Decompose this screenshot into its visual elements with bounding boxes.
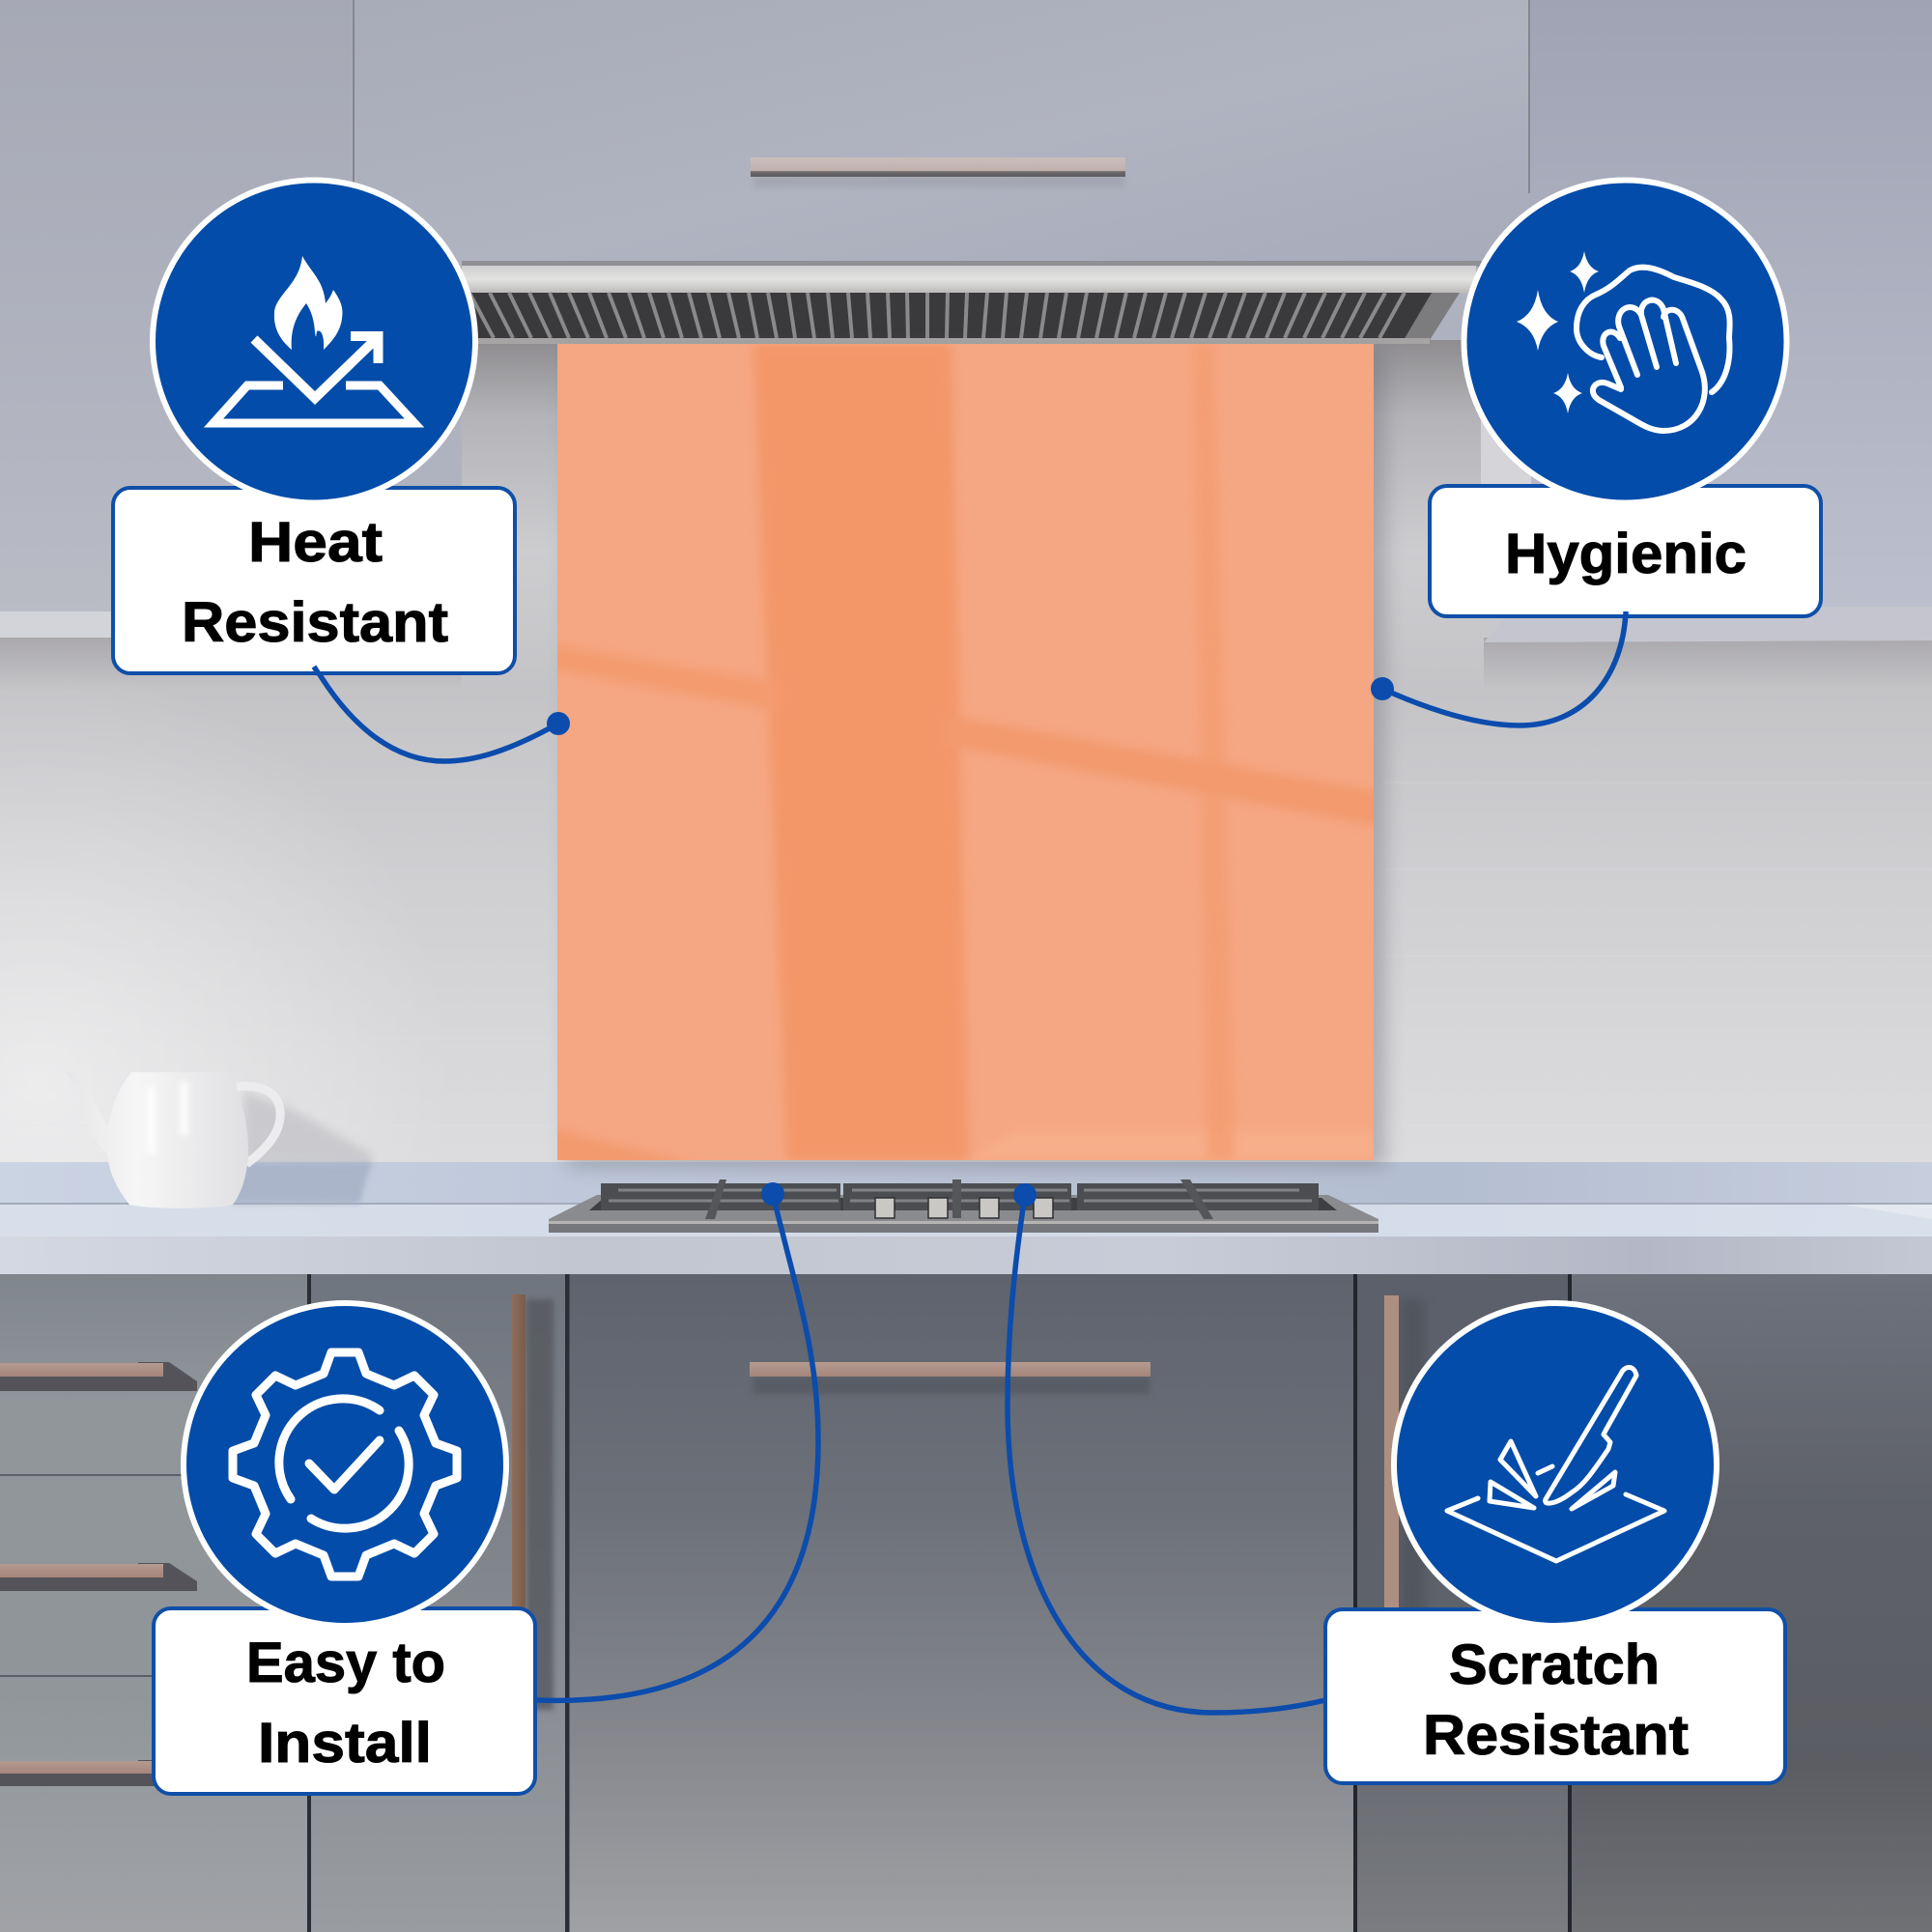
icon: gear with check mark: [233, 1352, 457, 1577]
label text: [246, 1632, 445, 1775]
icon badge: [1394, 1303, 1717, 1626]
label text: Easy to: [246, 1632, 445, 1694]
grate: centre: [843, 1179, 1071, 1218]
connector: heat resistant: [316, 668, 570, 761]
connector: easy to install: [537, 1182, 818, 1700]
kitchen background: upper cabinets: [0, 0, 1932, 640]
label text: [182, 511, 448, 654]
icon: flame over reflective surface: [213, 256, 414, 423]
label text: Resistant: [1423, 1704, 1689, 1767]
icon badge: [184, 1303, 506, 1626]
range hood: [444, 261, 1486, 344]
connector join: [314, 667, 319, 674]
icon badge: [1464, 180, 1787, 502]
label box: [1430, 486, 1821, 616]
icon: knife scratching surface: [1447, 1367, 1664, 1561]
callout: heat resistant: [113, 180, 515, 674]
upper cabinet handle: [751, 157, 1125, 187]
door handles: [512, 1294, 1425, 1710]
connector: hygienic: [1371, 611, 1626, 725]
panel: orange glass splashback: [551, 344, 1381, 1164]
countertop: [0, 1162, 1932, 1275]
label text: Scratch: [1449, 1634, 1660, 1696]
hob knobs: [875, 1198, 1053, 1218]
label text: Install: [258, 1712, 432, 1775]
callout: easy to install: [154, 1303, 535, 1794]
callout: hygienic: [1430, 180, 1821, 618]
label text: Hygienic: [1505, 523, 1747, 585]
connector join: [1623, 611, 1629, 618]
label box: [113, 488, 515, 673]
drawer handles: [0, 1362, 197, 1786]
callout: scratch resistant: [1325, 1303, 1785, 1783]
lower cabinets: [0, 1274, 1932, 1932]
icon: hand wiping with sparkles: [1517, 251, 1730, 431]
teapot: [65, 1072, 372, 1208]
tiled wall: [0, 340, 1932, 1164]
label text: [1423, 1634, 1689, 1767]
connector: scratch resistant: [1008, 1183, 1325, 1713]
panel shadow: [568, 350, 1385, 1167]
gas hob: [549, 1179, 1378, 1233]
grate: left: [601, 1179, 840, 1219]
label box: [154, 1608, 535, 1794]
icon badge: [153, 180, 475, 502]
grate: right: [1077, 1179, 1319, 1219]
label box: [1325, 1609, 1785, 1783]
label text: Heat: [248, 511, 383, 574]
label text: Resistant: [182, 591, 448, 654]
